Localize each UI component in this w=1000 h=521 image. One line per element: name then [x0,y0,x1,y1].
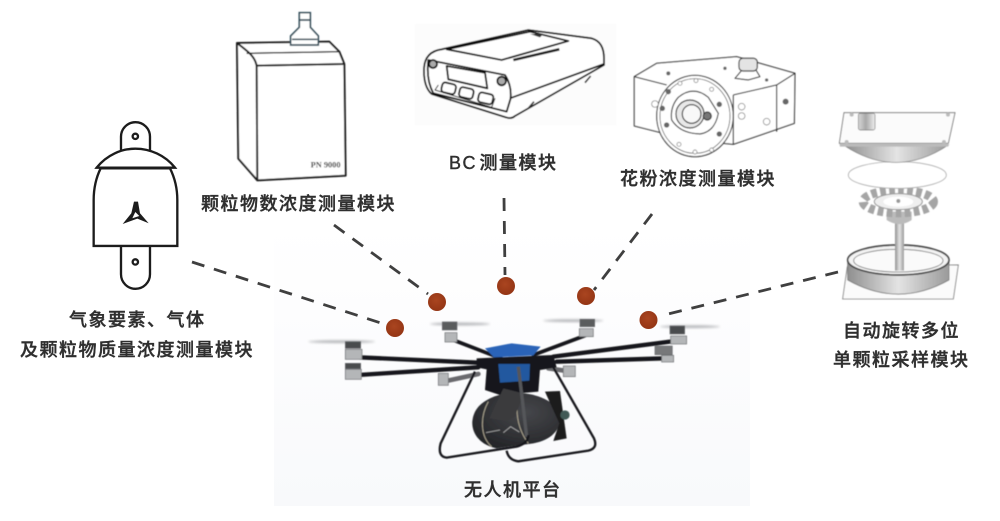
label: weather and gas module: 气象要素、气体 [69,310,206,330]
drone body [477,355,557,395]
label: sampler module: 单颗粒采样模块 [833,350,970,370]
icon: drone platform [308,319,720,461]
sampler lower ring and plate [843,245,958,299]
sampler filter disc [848,162,946,188]
label: drone platform: 无人机平台 [464,480,562,500]
label: weather and gas module [20,310,254,360]
landing frame [440,367,595,461]
callout: connection dots [386,277,658,337]
label: BC module: BC 测量模块 [449,153,558,173]
icon: particle number module box [237,13,346,180]
model label: PN 9000 [311,161,340,170]
icon: pollen module [634,57,795,157]
label: sampler module: 自动旋转多位 [843,320,960,341]
icon: weather and gas module [94,122,177,289]
icon: rotating sampler module [839,113,958,299]
label: pollen module: 花粉浓度测量模块 [620,169,776,189]
payload tank [472,393,561,448]
label: sampler module [833,320,970,370]
sampler shaft and rotor [895,223,904,271]
propeller blur [308,319,720,343]
drone motors [345,319,687,385]
sampler top plate and bowl [845,145,948,162]
callout: dashed connectors [192,198,838,324]
label: particle number module: 颗粒物数浓度测量模块 [201,194,396,214]
nozzle [291,13,318,45]
drone arms [358,335,675,382]
panel: drone photo background [274,226,750,506]
icon: BC module [415,24,617,126]
label: weather and gas module: 及颗粒物质量浓度测量模块 [20,340,254,360]
